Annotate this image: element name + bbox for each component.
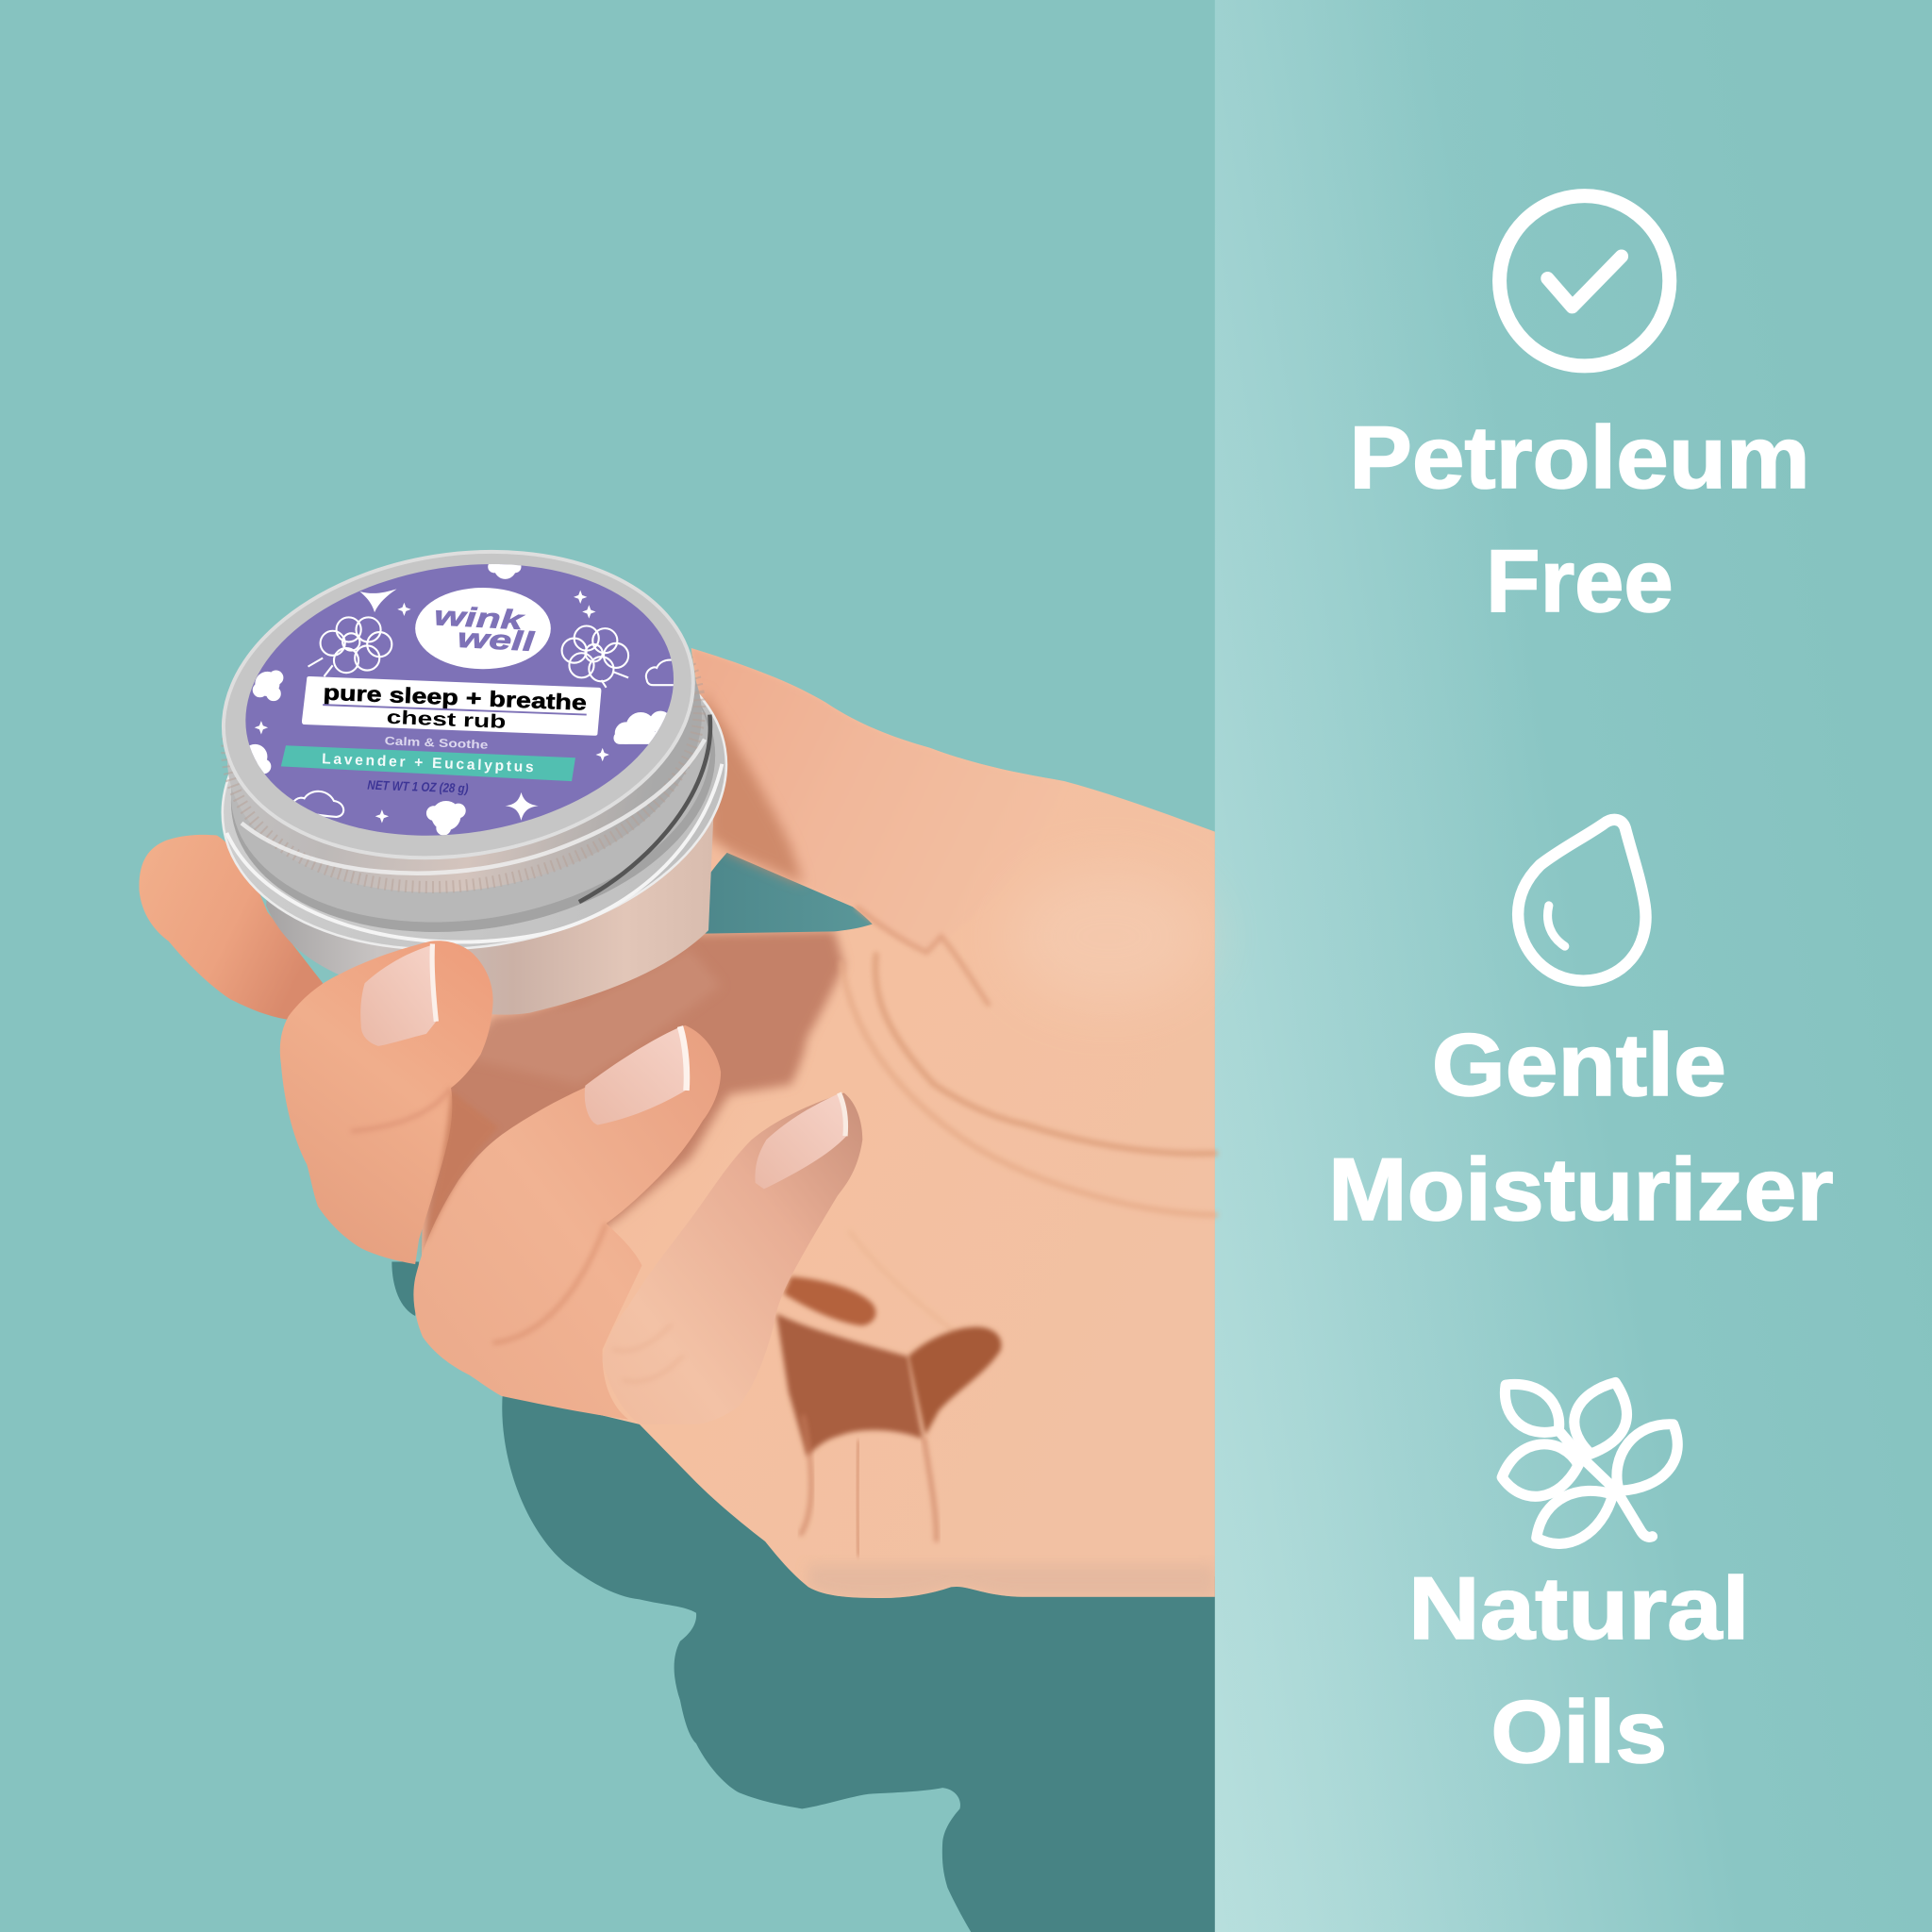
label xyxy=(245,564,674,836)
feature: gentle moisturizer xyxy=(1328,820,1834,1239)
scent bar: Lavender + Eucalyptus xyxy=(322,751,534,775)
nail xyxy=(360,945,436,1046)
cast shadow on palm, upper blob xyxy=(784,1276,875,1325)
thumb upper tone xyxy=(691,649,1063,826)
product name line 1: pure sleep + breathe xyxy=(323,680,587,715)
shade between fingers xyxy=(425,1091,499,1244)
dark thread shadow on right side xyxy=(579,715,710,902)
sheep outline right xyxy=(562,626,628,688)
icon: water drop xyxy=(1518,820,1646,981)
left photo background xyxy=(0,0,1216,1932)
label: free: Free xyxy=(1486,531,1674,630)
nail xyxy=(755,1093,847,1189)
net weight: NET WT 1 OZ (28 g) xyxy=(367,778,469,795)
wrist-side creases xyxy=(801,1417,937,1555)
palm highlight xyxy=(1010,869,1208,1004)
middle finger xyxy=(280,941,493,1264)
gap line xyxy=(208,592,738,965)
lid highlight on front edge xyxy=(242,740,705,874)
icon: check circle xyxy=(1500,196,1670,366)
base rim highlight xyxy=(226,764,722,942)
logo circle xyxy=(415,588,551,669)
right panel with gradient xyxy=(1215,0,1932,1932)
crease under knuckle xyxy=(351,1088,451,1131)
lid skirt xyxy=(205,548,724,925)
feature: petroleum free xyxy=(1349,196,1810,630)
lid top ring xyxy=(201,519,715,891)
feature: natural oils xyxy=(1408,1382,1750,1781)
ring finger xyxy=(603,1093,862,1424)
cast shadow on palm, main area xyxy=(776,1313,923,1457)
shaded palm behind fingers xyxy=(425,930,844,1281)
label: moisturizer: Moisturizer xyxy=(1328,1140,1834,1239)
tin base rim xyxy=(199,593,750,984)
cast shadow of hand xyxy=(391,1261,1216,1932)
product name line 2: chest rub xyxy=(386,708,507,733)
small white sheep xyxy=(253,557,521,836)
lower hand edge shade xyxy=(808,1565,1215,1598)
thumb shadow next to tin xyxy=(702,690,804,883)
purple label disc xyxy=(225,535,693,865)
nail xyxy=(585,1026,688,1124)
index finger xyxy=(413,1025,721,1420)
threaded neck xyxy=(209,588,732,955)
lid skirt ribs xyxy=(204,539,723,920)
label: natural: Natural xyxy=(1408,1558,1750,1657)
icon: leaf branch xyxy=(1502,1382,1677,1543)
clouds xyxy=(242,711,675,774)
gap between thumb and palm xyxy=(676,853,873,934)
nail tip xyxy=(839,1093,845,1136)
tagline: Calm & Soothe xyxy=(384,734,489,752)
label: oils: Oils xyxy=(1491,1682,1667,1781)
scent bar xyxy=(281,745,575,781)
tin xyxy=(221,549,728,1015)
sheep outline left xyxy=(308,617,391,676)
tin reflection on palm xyxy=(462,949,721,1084)
knuckle crease xyxy=(492,1224,607,1343)
palm and thumb xyxy=(422,648,1215,1598)
finger wrinkles xyxy=(612,1324,684,1382)
front fingers xyxy=(280,941,862,1424)
logo text: wink xyxy=(433,601,526,636)
back finger xyxy=(139,835,323,1020)
nail tip xyxy=(680,1026,687,1091)
product name box xyxy=(302,676,601,736)
cast shadow on palm, right blob xyxy=(908,1327,1001,1436)
stars xyxy=(255,589,609,823)
label: petroleum: Petroleum xyxy=(1349,408,1810,507)
label: gentle: Gentle xyxy=(1432,1015,1726,1114)
logo text second line: well xyxy=(457,624,536,658)
nail tip xyxy=(432,943,436,1022)
tin base body xyxy=(266,789,715,1015)
palm creases xyxy=(841,908,1215,1356)
hand holding the tin xyxy=(139,648,1215,1598)
